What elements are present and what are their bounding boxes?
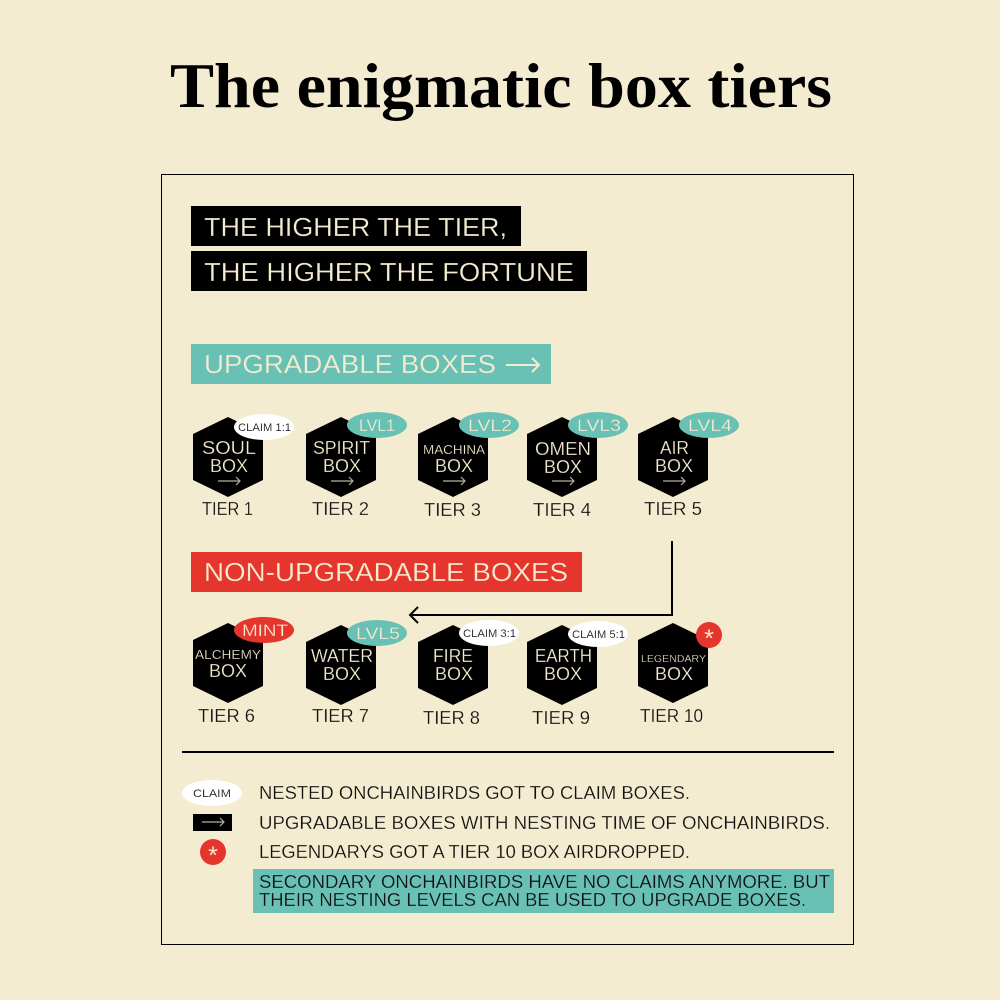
box: tier 10 legendary: BOX [655, 664, 693, 684]
box: tier 5 air: AIR [660, 438, 689, 458]
heading: tagline line 1: THE HIGHER THE TIER, [204, 212, 507, 242]
box: tier 10 legendary: TIER 10 [640, 706, 703, 726]
box: tier 2 spirit: BOX [323, 456, 361, 476]
legend: claim: CLAIM [193, 788, 231, 800]
box: tier 8 fire [418, 620, 519, 728]
box: tier 4 omen: TIER 4 [533, 500, 591, 520]
box: tier 3 machina: LVL2 [468, 416, 512, 435]
box: tier 6 alchemy: MINT [242, 621, 288, 640]
box: tier 9 earth: TIER 9 [532, 708, 590, 728]
heading: non-upgradable boxes [191, 552, 582, 592]
box: tier 5 air [638, 412, 739, 519]
box: tier 4 omen: BOX [544, 457, 582, 477]
title: The enigmatic box tiers [170, 51, 832, 121]
callout: secondary note: THEIR NESTING LEVELS CAN BE USED TO UPGRADE BOXES. [259, 890, 806, 910]
box: tier 3 machina: TIER 3 [424, 500, 481, 520]
box: tier 7 water: WATER [311, 646, 373, 666]
box: tier 10 legendary: * [704, 625, 714, 653]
legend: legendary: LEGENDARYS GOT A TIER 10 BOX AIRDROPPED. [259, 842, 690, 862]
box: tier 6 alchemy: TIER 6 [198, 706, 255, 726]
box: tier 8 fire: TIER 8 [423, 708, 480, 728]
box: tier 5 air: BOX [655, 456, 693, 476]
box: tier 3 machina: BOX [435, 456, 473, 476]
box: tier 10 legendary: LEGENDARY [641, 654, 706, 665]
box: tier 4 omen [527, 412, 628, 520]
heading: tagline line 2: THE HIGHER THE FORTUNE [204, 257, 574, 287]
box: tier 9 earth [527, 621, 628, 728]
box: tier 6 alchemy [193, 617, 294, 726]
box: tier 3 machina [418, 412, 519, 520]
box: tier 8 fire: BOX [435, 664, 473, 684]
box: tier 7 water [306, 620, 407, 726]
box: tier 1 soul: TIER 1 [202, 499, 253, 519]
box: tier 7 water: BOX [323, 664, 361, 684]
callout: secondary note [253, 869, 834, 913]
panel: main frame [162, 174, 854, 944]
callout: secondary note: SECONDARY ONCHAINBIRDS HAVE NO CLAIMS ANYMORE. BUT [259, 872, 830, 892]
box: tier 6 alchemy: ALCHEMY [195, 647, 261, 662]
box: tier 4 omen: OMEN [535, 439, 591, 459]
box: tier 8 fire: FIRE [433, 646, 473, 666]
box: tier 3 machina: MACHINA [423, 442, 485, 457]
legend: legendary [200, 839, 690, 870]
divider line [182, 751, 834, 753]
box: tier 7 water: LVL5 [356, 624, 400, 643]
box: tier 7 water: TIER 7 [312, 706, 369, 726]
heading: upgradable boxes: UPGRADABLE BOXES [204, 349, 496, 379]
heading: non-upgradable boxes: NON-UPGRADABLE BOXES [204, 557, 568, 587]
box: tier 9 earth: BOX [544, 664, 582, 684]
box: tier 2 spirit: LVL1 [359, 416, 395, 435]
box: tier 8 fire: CLAIM 3:1 [463, 628, 516, 640]
box: tier 9 earth: CLAIM 5:1 [572, 629, 625, 641]
box: tier 4 omen: LVL3 [577, 416, 621, 435]
box: tier 2 spirit: SPIRIT [313, 438, 370, 458]
legend: claim: NESTED ONCHAINBIRDS GOT TO CLAIM BOXES. [259, 783, 690, 803]
box: tier 5 air: LVL4 [688, 416, 732, 435]
heading: upgradable boxes [191, 344, 551, 384]
box: tier 1 soul: BOX [210, 456, 248, 476]
legend: upgradable: UPGRADABLE BOXES WITH NESTING TIME OF ONCHAINBIRDS. [259, 813, 830, 833]
box: tier 1 soul: SOUL [202, 438, 256, 458]
heading: tagline line 2 [191, 251, 587, 291]
heading: tagline line 1 [191, 206, 521, 246]
box: tier 6 alchemy: BOX [209, 661, 247, 681]
box: tier 10 legendary [638, 622, 722, 726]
box: tier 5 air: TIER 5 [644, 499, 702, 519]
legend: claim [182, 780, 690, 806]
box: tier 2 spirit: TIER 2 [312, 499, 369, 519]
box: tier 9 earth: EARTH [535, 646, 592, 666]
arrow: tier 5 to tier 6 [410, 541, 672, 623]
legend: legendary: * [208, 842, 218, 870]
box: tier 1 soul [193, 414, 294, 519]
box: tier 2 spirit [306, 412, 407, 519]
box: tier 1 soul: CLAIM 1:1 [238, 422, 291, 434]
